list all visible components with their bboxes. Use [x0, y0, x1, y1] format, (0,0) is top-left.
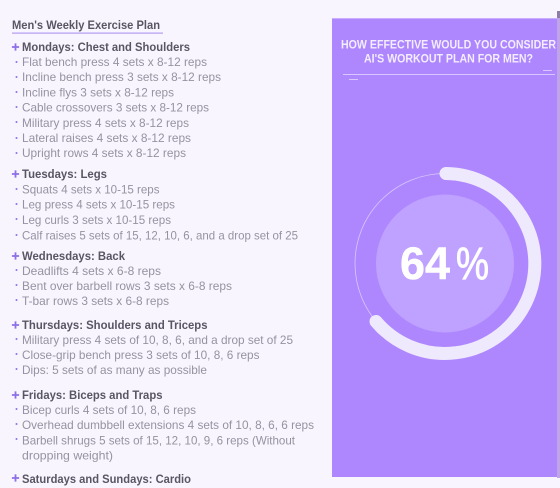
- section: Wednesdays: Wednesdays: Back: [22, 249, 125, 263]
- panel heading: [341, 40, 557, 66]
- section: Mondays: Flat bench press 4 sets x 8-12 reps: [22, 55, 207, 69]
- section: Mondays: Incline flys 3 sets x 8-12 reps: [22, 86, 174, 100]
- section: Fridays: Fridays: Biceps and Traps: [22, 388, 163, 402]
- section: Tuesdays: Leg press 4 sets x 10-15 reps: [22, 198, 175, 212]
- section: Fridays: Barbell shrugs 5 sets of 15, 12, 10, 9, 6 reps (Without: [22, 434, 296, 448]
- section: Saturdays and Sundays: Saturdays and Sundays: Cardio: [22, 472, 191, 486]
- section: Fridays: dropping weight): [22, 448, 113, 462]
- chart: 64% donut: [355, 174, 535, 354]
- section: Tuesdays: Calf raises 5 sets of 15, 12, 10, 6, and a drop set of 25: [22, 228, 298, 242]
- section: Tuesdays: Tuesdays: Legs: [22, 167, 107, 181]
- percentage value: [400, 238, 489, 289]
- section: Fridays: [12, 388, 314, 462]
- section: Mondays: Cable crossovers 3 sets x 8-12 reps: [22, 100, 209, 114]
- title: Men's Weekly Exercise Plan: [12, 18, 160, 32]
- section: Mondays: [12, 40, 221, 160]
- section: Thursdays: Dips: 5 sets of as many as possible: [22, 363, 207, 377]
- section: Tuesdays: Leg curls 3 sets x 10-15 reps: [22, 213, 171, 227]
- section: Wednesdays: Deadlifts 4 sets x 6-8 reps: [22, 264, 161, 278]
- section: Fridays: Overhead dumbbell extensions 4 sets of 10, 8, 6, 6 reps: [22, 418, 314, 432]
- section: Thursdays: Thursdays: Shoulders and Triceps: [22, 318, 208, 332]
- section: Fridays: Bicep curls 4 sets of 10, 8, 6 reps: [22, 403, 196, 417]
- panel heading: AI'S WORKOUT PLAN FOR MEN?: [364, 54, 533, 66]
- section: Mondays: Upright rows 4 sets x 8-12 reps: [22, 146, 186, 160]
- section: Mondays: Mondays: Chest and Shoulders: [22, 40, 190, 54]
- section: Mondays: Military press 4 sets x 8-12 reps: [22, 116, 189, 130]
- percentage value: 64: [400, 238, 450, 289]
- section: Thursdays: Close-grip bench press 3 sets of 10, 8, 6 reps: [22, 348, 260, 362]
- section: Tuesdays: Squats 4 sets x 10-15 reps: [22, 182, 160, 196]
- section: Wednesdays: Bent over barbell rows 3 sets x 6-8 reps: [22, 279, 232, 293]
- section: Mondays: Lateral raises 4 sets x 8-12 reps: [22, 131, 191, 145]
- section: Thursdays: Military press 4 sets of 10, 8, 6, and a drop set of 25: [22, 333, 293, 347]
- panel: survey result: [332, 11, 560, 478]
- section: Wednesdays: [12, 249, 232, 308]
- section: Tuesdays: [12, 167, 298, 242]
- percentage value: %: [456, 238, 489, 289]
- section: Mondays: Incline bench press 3 sets x 8-12 reps: [22, 70, 221, 84]
- section: Wednesdays: T-bar rows 3 sets x 6-8 reps: [22, 294, 169, 308]
- section: Thursdays: [12, 318, 293, 377]
